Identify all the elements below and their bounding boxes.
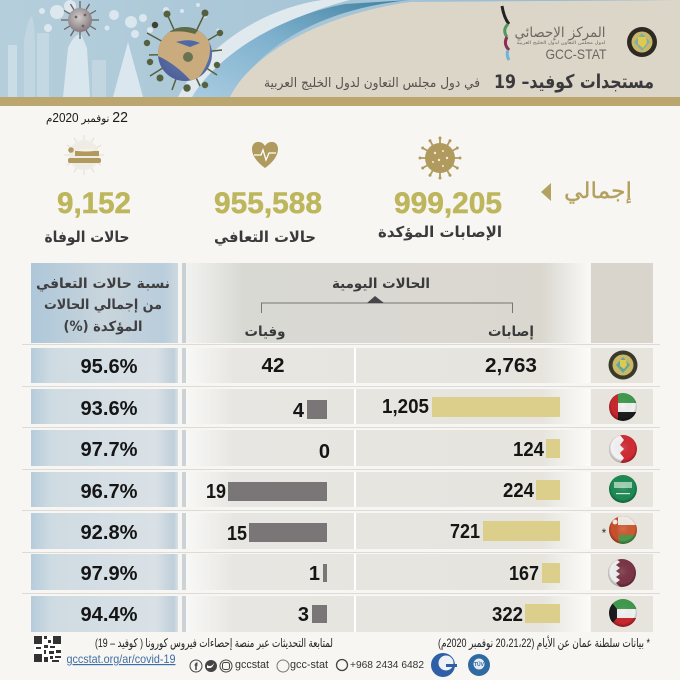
- row: Oman: [31, 513, 653, 549]
- footnote marker: *: [602, 526, 607, 540]
- header beige panel: [230, 0, 680, 97]
- date: 22 نوفمبر 2020م: [46, 109, 128, 126]
- link: gccstat.org/ar/covid-19: [66, 652, 176, 666]
- stat: confirmed cases: [378, 138, 502, 241]
- row: Qatar: [31, 554, 653, 590]
- icon: GCC emblem: [608, 350, 638, 380]
- icon: Bahrain flag: [609, 435, 637, 463]
- row: Bahrain: 124: [513, 439, 545, 461]
- logo: GCC-STAT: GCC-STAT: [546, 46, 607, 62]
- stat: deaths: حالات الوفاة: [44, 228, 130, 246]
- icon: virus: [420, 138, 460, 178]
- icon: instagram: [220, 660, 232, 672]
- QR code: [34, 636, 61, 662]
- logo: TUV badge: [468, 654, 490, 676]
- heading: total: إجمالي: [564, 179, 632, 204]
- row: UAE: [31, 389, 653, 424]
- icon: Oman flag: [609, 516, 637, 544]
- row: Bahrain: [31, 430, 653, 466]
- row: Oman: 15: [227, 523, 247, 545]
- row: GCC total: 95.6%: [80, 356, 138, 378]
- logo: G certification: [431, 653, 457, 677]
- logo: GCC-STAT: [502, 6, 607, 62]
- header art: skyline: [8, 0, 220, 97]
- icon: whatsapp: [336, 660, 348, 670]
- row: Oman: 721: [450, 521, 480, 543]
- row: Kuwait: 322: [492, 604, 523, 626]
- row: Bahrain: 0: [319, 441, 330, 463]
- header: daily cases: وفيات: [244, 324, 286, 340]
- icon: Kuwait flag: [609, 599, 637, 627]
- follow-up note: لمتابعة التحديثات عبر منصة إحصاءات فيروس كورونا ( كوفيد – 19): [95, 636, 333, 651]
- stat: confirmed cases: الإصابات المؤكدة: [378, 223, 502, 241]
- row: UAE: 1,205: [382, 396, 429, 418]
- row: GCC total: 42: [262, 355, 284, 377]
- header art: earth virus globe: [144, 10, 223, 92]
- row: Bahrain: 97.7%: [80, 439, 138, 461]
- row: Qatar: 167: [509, 563, 539, 585]
- arrow: total marker: [541, 183, 551, 201]
- social handles: gcc-stat: [290, 659, 328, 671]
- header: recovery ratio: المؤكدة (%): [64, 319, 142, 335]
- stat: recoveries: 955,588: [214, 187, 322, 220]
- row: Saudi Arabia: [31, 472, 653, 507]
- logo: GCC-STAT: لدول مجلس التعاون لدول الخليج العربية: [516, 41, 606, 46]
- header art: grey virus: [61, 1, 99, 39]
- row: Oman: 92.8%: [80, 522, 138, 544]
- row: Kuwait: 3: [298, 604, 309, 626]
- gold band: [0, 97, 680, 106]
- row: UAE: 4: [293, 400, 305, 422]
- header: daily cases: الحالات اليومية: [332, 276, 430, 292]
- icon: heart: [252, 142, 278, 168]
- row: Kuwait: [31, 596, 653, 632]
- icon: Qatar flag: [608, 559, 636, 587]
- logo: TUV badge: TÜV: [474, 661, 485, 668]
- row: Saudi Arabia: 96.7%: [80, 481, 138, 503]
- row: Saudi Arabia: 224: [503, 480, 535, 502]
- social handles: +968 2434 6482: [350, 659, 424, 671]
- icon: linkedin handle: [277, 660, 289, 672]
- header: recovery ratio: من إجمالي الحالات: [44, 297, 162, 313]
- icon: facebook: f: [194, 662, 198, 673]
- header: recovery ratio: نسبة حالات التعافي: [36, 276, 170, 292]
- row: Qatar: 1: [309, 563, 320, 585]
- stat: confirmed cases: 999,205: [394, 187, 502, 220]
- header banner: [0, 0, 680, 98]
- row: Qatar: 97.9%: [80, 563, 138, 585]
- logo: GCC emblem: [627, 27, 657, 57]
- row: UAE: 93.6%: [80, 398, 138, 420]
- header: daily cases: إصابات: [488, 324, 534, 340]
- icon: twitter: [205, 660, 217, 672]
- stat: deaths: [44, 135, 131, 246]
- social handles: gccstat: [235, 659, 269, 671]
- subtitle: في دول مجلس التعاون لدول الخليج العربية: [264, 76, 480, 91]
- stat: recoveries: [214, 142, 322, 246]
- header: daily cases: [244, 276, 534, 340]
- icon: bed with patient: [64, 135, 104, 175]
- header art: curved swooshes: [178, 0, 410, 97]
- panel: table header: [31, 263, 653, 343]
- row: Saudi Arabia: 19: [206, 481, 226, 503]
- row separators: [22, 344, 660, 594]
- social handles: [190, 659, 424, 673]
- header: recovery ratio: [36, 276, 170, 335]
- logo: GCC-STAT: المركز الإحصائي: [514, 25, 606, 41]
- row: GCC total: [31, 348, 653, 383]
- icon: Saudi flag: [609, 475, 637, 503]
- icon: UAE flag: [609, 393, 637, 421]
- stat: deaths: 9,152: [57, 187, 131, 220]
- stat: recoveries: حالات التعافي: [214, 228, 316, 246]
- icon: facebook: [190, 660, 202, 673]
- row: GCC total: 2,763: [485, 355, 537, 377]
- title: مستجدات كوفيد– 19: [494, 71, 654, 93]
- row: Kuwait: 94.4%: [80, 604, 138, 626]
